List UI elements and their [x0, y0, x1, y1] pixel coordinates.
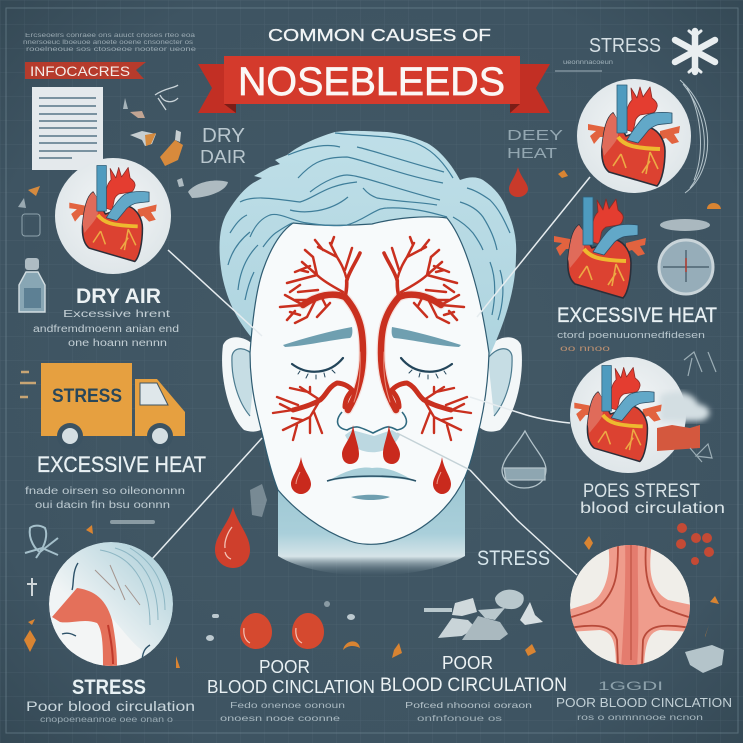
blood drops on face [291, 425, 451, 494]
illustration: delivery truck: STRESS [52, 386, 122, 407]
icon: blood drop top [509, 167, 528, 197]
connector lines [133, 177, 590, 580]
decorative fragments upper left [18, 85, 228, 236]
text block: poor blood circulation centre left: onoesn nooe coonne [220, 713, 340, 723]
panel: nasal cross-section [49, 542, 173, 668]
text block: poor blood circulation centre right [380, 652, 567, 723]
text block: poor blood circulation centre right: POOR [442, 652, 493, 673]
heart without circle [554, 197, 646, 298]
text block: stress lower left: STRESS [72, 676, 146, 699]
text block: dry air: DRY AIR [76, 285, 161, 308]
text: dry dair: DRY [202, 125, 245, 147]
nose [338, 412, 406, 452]
text block: excessive heat right: oo nnoo [560, 344, 611, 353]
text block: poor blood circulation centre right: Pofced nhoonoi ooraon [405, 700, 532, 710]
text block: excessive heat right: EXCESSIVE HEAT [557, 304, 717, 327]
neck [278, 470, 465, 576]
left ear [222, 337, 266, 432]
decorative dashes [110, 484, 355, 641]
hair [220, 131, 516, 355]
text block: stress lower left: cnopoeneannoe oee onan o [40, 715, 174, 724]
face shape [250, 217, 489, 544]
illustration: delivery truck [20, 363, 185, 449]
text block: poor blood circulation centre left [207, 657, 375, 723]
heading: stress centre: STRESS [477, 547, 550, 570]
panel: heart in circle, left [55, 158, 171, 274]
text block: poor blood circulation centre right: BLOOD CIRCULATION [380, 674, 567, 696]
top-left small caption: Ercseoelrs conraee ons auuct cnoses rteo eoa [25, 33, 196, 39]
text block: poor blood circulation centre left: Fedo onenoe oonoun [230, 700, 345, 710]
icon: large blood drop [215, 507, 250, 568]
icon: snowflake [675, 31, 715, 72]
top-left small caption [23, 33, 197, 53]
text block: poor blood circulation centre left: BLOOD CINCLATION [207, 677, 375, 697]
text: dry dair [200, 125, 246, 167]
top-left small caption: nnersoeuc lboeuoe anoete ooene cnsonecter os [23, 40, 193, 46]
text block: excessive heat left: oui dacin fin bsu oonnn [35, 500, 170, 511]
title [198, 25, 550, 113]
steam cloud [660, 392, 710, 421]
text block: poes strest [580, 481, 725, 517]
decorative sketch lower left [25, 526, 58, 596]
heading: common causes of: COMMON CAUSES OF [268, 25, 491, 45]
icons: two blood drops [240, 613, 324, 649]
text block: poor blood circulation centre right: onfnfonoue os [417, 714, 502, 723]
text: dry dair: DAIR [200, 147, 246, 167]
eyebrows [283, 327, 461, 347]
figure: face [220, 131, 522, 576]
text block: excessive heat right [557, 304, 717, 353]
text block: dry air: andfremdmoenn anian end [33, 324, 179, 335]
heading: stress top right: STRESS [589, 34, 661, 57]
blood vessels [273, 237, 471, 440]
panel: blood vessel cross [568, 540, 692, 668]
illustration: rock pile [424, 590, 543, 640]
heading: stress top right: ueonnnacoeun [563, 59, 613, 66]
ribbon label: INFOCACRES [30, 63, 130, 79]
decorative sketch right [684, 352, 716, 462]
text block: dry air: Excessive hrent [63, 309, 170, 320]
heading: nosebleeds: NOSEBLEEDS [238, 60, 505, 104]
icon: flask [502, 431, 546, 488]
text: deey heat [507, 127, 563, 162]
text block: poor blood circulation centre left: POOR [259, 657, 310, 677]
red banner [198, 56, 550, 113]
text block: excessive heat left: EXCESSIVE HEAT [37, 452, 206, 477]
closed eyes [292, 358, 452, 379]
heading: stress top right [555, 34, 661, 71]
icon: small crystal [685, 645, 724, 673]
text block: excessive heat left [25, 452, 206, 511]
text block: poor blood circulation right: POOR BLOOD CINCLATION [556, 695, 732, 710]
icon: paper document [32, 87, 103, 170]
top-left small caption: rooelneoue sos ctosoeoe nooteor ueone [26, 47, 197, 53]
text block: poor blood circulation right: 1GGDI [598, 679, 663, 693]
text block: stress lower left [26, 676, 195, 724]
decorative red cluster [676, 523, 714, 565]
text block: dry air: one hoann nennn [68, 338, 167, 349]
hair strands [228, 133, 510, 320]
text block: excessive heat right: ctord poenuuonnedfidesen [557, 330, 705, 341]
icon: bottle [19, 258, 45, 312]
mouth [327, 468, 416, 500]
text block: excessive heat left: fnade oirsen so oileononnn [25, 486, 185, 497]
panel: heart in circle, top right [577, 79, 691, 193]
text: deey heat: HEAT [507, 145, 557, 162]
text block: poes strest: blood circulation [580, 500, 725, 517]
text block: poor blood circulation right: ros o onmnnooe ncnon [577, 713, 703, 722]
panel: heart in circle with vapor [570, 357, 710, 473]
text block: stress lower left: Poor blood circulation [26, 698, 195, 714]
red block [657, 425, 700, 451]
decorative arcs [680, 80, 708, 193]
text: deey heat: DEEY [507, 127, 563, 144]
text block: poes strest: POES STREST [583, 481, 700, 502]
icon: gauge clock [659, 219, 713, 294]
decorative orange marks [24, 170, 721, 668]
text block: poor blood circulation right [556, 679, 732, 722]
right ear [478, 337, 522, 432]
text block: dry air [33, 285, 179, 349]
